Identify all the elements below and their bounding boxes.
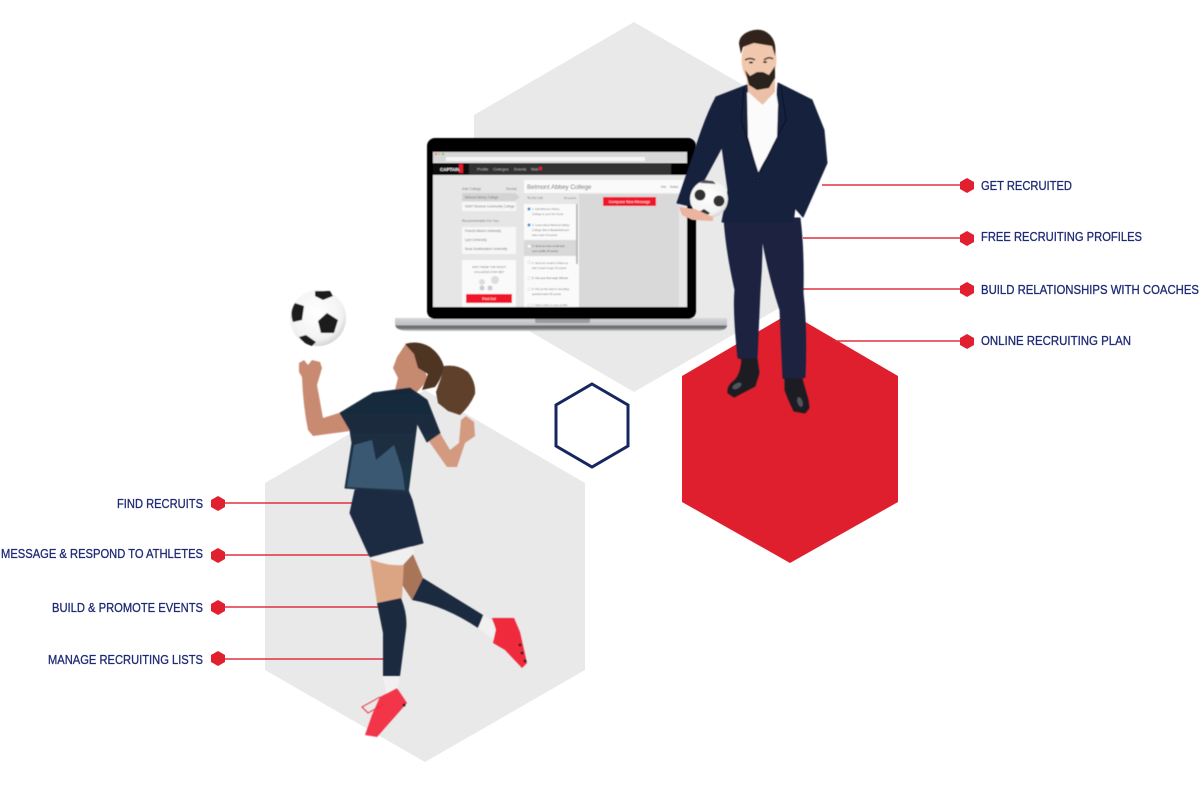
laptop [395, 138, 727, 331]
college sidebar [462, 187, 520, 307]
label: online recruiting plan: ONLINE RECRUITING PLAN [981, 333, 1131, 348]
trousers [724, 218, 806, 380]
college header: Info [661, 185, 667, 189]
to-do list: take notes 10 points [532, 233, 558, 237]
to-do list: 60 points [564, 196, 577, 200]
to-do list: 1. Add Belmont Abbey [532, 207, 560, 211]
hair [405, 343, 444, 390]
head [739, 30, 776, 90]
college sidebar: Belmont Abbey College [465, 196, 498, 200]
jersey [340, 388, 440, 493]
message panel: Compose New Message [609, 200, 650, 204]
college sidebar: Lynn University [465, 238, 487, 242]
shoe shine [731, 381, 804, 408]
woman heading football [299, 343, 527, 737]
ball under arm [690, 180, 728, 218]
laptop bezel [427, 138, 696, 319]
white socks [383, 616, 496, 696]
to-do list: 3. Send an intro email and [532, 244, 565, 248]
message panel [579, 194, 679, 307]
shoes [728, 359, 809, 413]
college header [524, 180, 687, 193]
app screen [433, 152, 687, 307]
label: manage recruiting lists: MANAGE RECRUITING LISTS [48, 652, 203, 667]
to-do list: questionnaire 50 points [532, 292, 562, 296]
to-do list: To-Do List [527, 196, 543, 200]
navy outline hexagon [556, 384, 628, 467]
ponytail [436, 366, 475, 415]
red boots [362, 618, 527, 737]
hand [679, 207, 713, 221]
college sidebar: SUNY Broome Community College [465, 204, 515, 208]
jacket [677, 83, 827, 222]
laptop base [395, 318, 727, 331]
nav bar: Mail [531, 166, 538, 172]
label: find recruits: FIND RECRUITS [117, 496, 203, 511]
undershorts [368, 545, 415, 565]
to-do list: with Coach Unger 20 points [532, 266, 567, 270]
to-do list: College to your list 10 pts [532, 212, 564, 216]
college sidebar: ARE THESE THE RIGHT [472, 265, 506, 269]
raised arm [299, 360, 350, 436]
shirt [747, 91, 778, 173]
standing sock [377, 598, 406, 676]
to-do list: 6. Fill out the team's recruiting [532, 287, 570, 291]
browser bar [433, 152, 687, 162]
beard [745, 66, 775, 90]
college sidebar: Find Out [482, 297, 496, 301]
shorts [350, 490, 423, 557]
red hexagon [682, 313, 898, 563]
label: get recruited: GET RECRUITED [981, 178, 1072, 193]
college header: Notes [670, 185, 679, 189]
thigh skin [370, 552, 423, 603]
college sidebar: Francis Marion University [465, 229, 501, 233]
college sidebar: Recommended For You [462, 219, 499, 223]
label: free recruiting profiles: FREE RECRUITING PROFILES [981, 229, 1142, 244]
back arm [428, 416, 475, 467]
to-do list: 4. Send an email to follow up [532, 261, 568, 265]
connector lines [224, 185, 962, 659]
college sidebar: Nova Southeastern University [465, 247, 508, 251]
eyes and brows [745, 58, 773, 64]
neck [747, 76, 775, 105]
jersey fold highlight [347, 440, 405, 490]
to-do list [524, 196, 579, 307]
label: build and promote events: BUILD & PROMOTE EVENTS [52, 600, 203, 615]
nav bar: CAPTAIN [440, 167, 460, 172]
college header: Belmont Abbey College [527, 184, 592, 191]
college sidebar: COLLEGES FOR ME? [474, 270, 505, 274]
grey hexagon: top [474, 22, 795, 392]
label: free recruiting profiles [960, 229, 1142, 246]
trailing sock [412, 578, 483, 628]
to-do list: College Men's Basketball and [532, 228, 569, 232]
college sidebar: Add College [462, 187, 481, 191]
label: message and respond to athletes: MESSAGE & RESPOND TO ATHLETES [1, 546, 203, 561]
nav bar: Events [514, 166, 526, 172]
nav bar: Colleges [493, 166, 509, 172]
neck and face [393, 345, 428, 392]
football [290, 290, 346, 346]
nav bar: Profile [477, 166, 489, 172]
to-do list: 5. Get your first reply 100 pts [532, 276, 569, 280]
college sidebar: Decide [506, 187, 517, 191]
grey hexagon: bottom [265, 390, 585, 762]
boot studs [402, 644, 526, 706]
man with football [677, 30, 827, 413]
lapels and button [741, 86, 786, 182]
to-do list: your profile 15 points [532, 249, 559, 253]
hair [739, 30, 775, 56]
nav bar [433, 163, 687, 175]
to-do list: 7. Add a video to your profile [532, 303, 568, 307]
to-do list: 2. Learn about Belmont Abbey [532, 223, 570, 227]
